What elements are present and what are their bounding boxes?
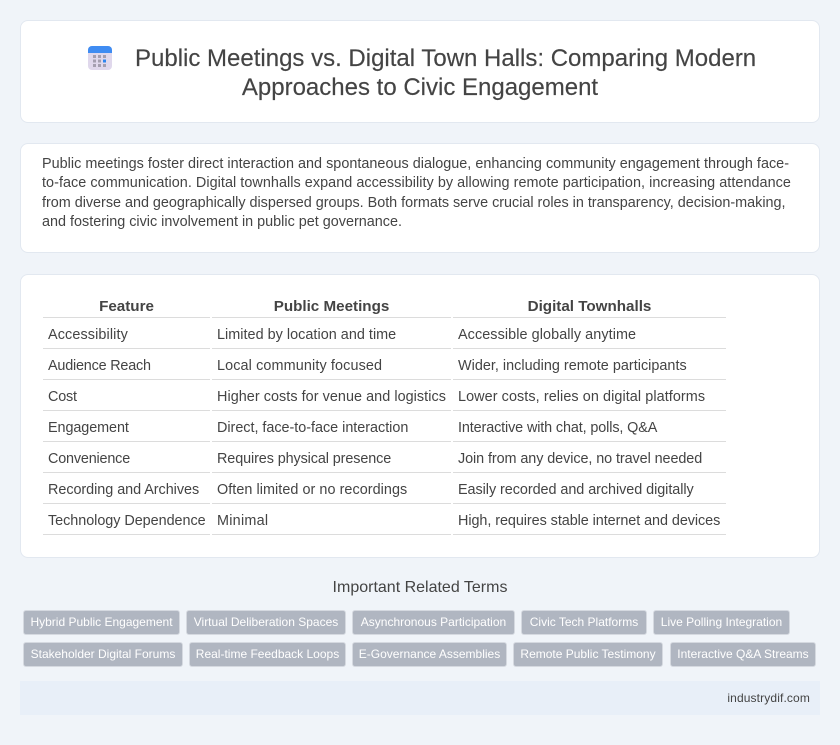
intro text: from diverse and geographically dispersed groups. Both formats serve crucial roles in transparency, decision-making, [42,195,785,211]
related terms chips: Real-time Feedback Loops [196,647,339,661]
row: Recording and Archives: Easily recorded and archived digitally [458,482,694,498]
related terms chips: E-Governance Assemblies [359,647,500,661]
comparison table: Public Meetings [274,298,389,315]
footer bar [20,681,820,715]
footer credit: industrydif.com [727,691,810,705]
row: Convenience: Requires physical presence [217,451,391,467]
title [135,45,756,101]
row: Cost: Lower costs, relies on digital platforms [458,389,705,405]
row: Engagement [43,420,726,442]
row: Technology Dependence [43,513,726,535]
row: Cost [43,389,726,411]
row: Convenience: Convenience [48,451,130,467]
related terms heading: Important Related Terms [333,579,507,596]
title: Public Meetings vs. Digital Town Halls: Comparing Modern [135,45,756,72]
row: Recording and Archives: Often limited or no recordings [217,482,407,498]
table headers [99,298,651,315]
row: Cost: Cost [48,389,77,405]
related terms chips: Civic Tech Platforms [530,615,638,629]
intro panel [20,143,820,253]
row: Audience Reach: Local community focused [217,358,382,374]
row: Accessibility [43,327,726,349]
row: Accessibility: Limited by location and time [217,327,396,343]
row: Convenience: Join from any device, no travel needed [458,451,702,467]
related terms chips: Stakeholder Digital Forums [31,647,175,661]
row: Technology Dependence: Minimal [217,513,268,529]
row: Audience Reach: Wider, including remote participants [458,358,687,374]
row: Cost: Higher costs for venue and logistics [217,389,446,405]
icon: calendar [88,46,112,70]
row: Technology Dependence: Technology Dependence [48,513,206,529]
row: Recording and Archives: Recording and Archives [48,482,199,498]
comparison table [43,298,726,535]
row: Audience Reach: Audience Reach [48,358,151,374]
related terms chips: Remote Public Testimony [520,647,656,661]
row: Technology Dependence: High, requires stable internet and devices [458,513,720,529]
row: Accessibility: Accessible globally anytime [458,327,636,343]
related terms chips [23,610,816,667]
row: Engagement: Interactive with chat, polls, Q&A [458,420,657,436]
row: Convenience [43,451,726,473]
panel: comparison table [20,274,820,558]
row: Recording and Archives [43,482,726,504]
row: Accessibility: Accessibility [48,327,128,343]
comparison table: Digital Townhalls [528,298,651,315]
intro text: and fostering civic involvement in public pet governance. [42,214,402,230]
title: Approaches to Civic Engagement [242,74,598,101]
related terms chips: Interactive Q&A Streams [677,647,809,661]
intro text: Public meetings foster direct interaction and spontaneous dialogue, enhancing community engagement through face- [42,156,789,172]
comparison table: Feature [99,298,154,315]
related terms chips: Asynchronous Participation [361,615,506,629]
row: Engagement: Direct, face-to-face interaction [217,420,408,436]
related terms chips: Hybrid Public Engagement [30,615,173,629]
header card [20,20,820,123]
row: Engagement: Engagement [48,420,129,436]
intro text: to-face communication. Digital townhalls expand accessibility by allowing remote participation, increasing attendance [42,175,791,191]
related terms chips: Virtual Deliberation Spaces [194,615,338,629]
intro text [42,156,791,230]
row: Audience Reach [43,358,726,380]
related terms chips: Live Polling Integration [661,615,782,629]
